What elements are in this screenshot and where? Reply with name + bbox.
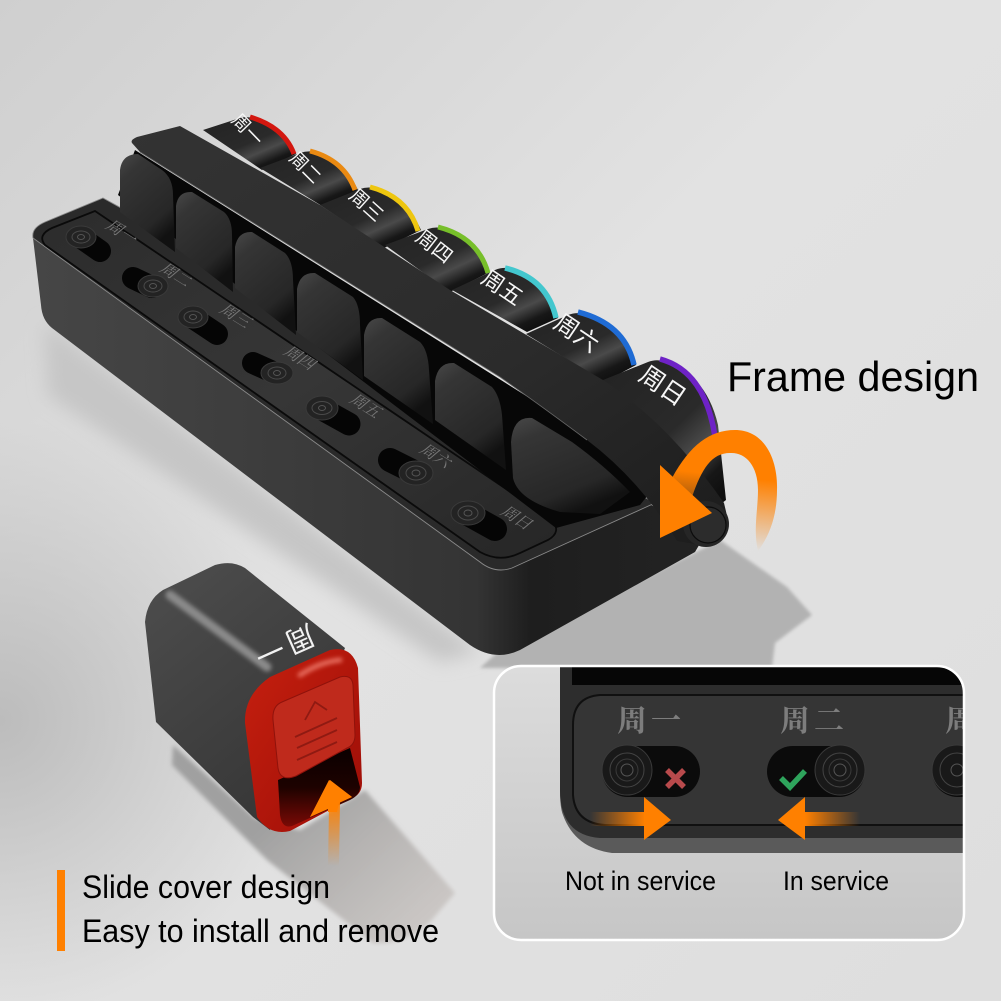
grey body	[145, 563, 345, 830]
sliding cover	[273, 676, 355, 778]
inset plate	[42, 211, 556, 558]
slot sunday	[451, 501, 495, 529]
box monday red	[203, 107, 296, 170]
box monday red: 周一	[226, 107, 270, 151]
switch: in service	[767, 745, 865, 797]
box wednesday yellow	[320, 182, 421, 248]
box thursday green	[385, 222, 490, 292]
tray day labels: 周二	[155, 258, 200, 291]
tray day labels: 周一	[101, 215, 146, 248]
box friday cyan: 周五	[476, 261, 530, 312]
slot thursday	[253, 362, 293, 384]
box sunday purple: 周日	[633, 356, 694, 414]
tray top face	[33, 198, 655, 570]
slot monday	[66, 226, 100, 251]
tray day labels: 周五	[345, 389, 390, 422]
box thursday green: 周四	[411, 222, 460, 269]
front pill compartments	[120, 154, 630, 514]
slot tuesday	[133, 275, 168, 297]
coloured day boxes behind frame	[203, 107, 726, 520]
panel border	[494, 666, 964, 940]
switch: not in service	[602, 745, 700, 797]
body highlight	[170, 595, 267, 667]
caption: slide cover	[82, 869, 439, 949]
single pill box	[145, 563, 362, 832]
black trench behind pills	[118, 150, 660, 528]
tray day labels	[101, 215, 541, 534]
label: not in service: Not in service	[565, 866, 716, 896]
arrow: left	[778, 797, 860, 840]
slot wednesday	[178, 306, 217, 334]
closeup labels: 周	[945, 696, 979, 740]
arrow: right	[590, 797, 671, 840]
caption: slide cover: Slide cover design	[82, 869, 330, 905]
tray day labels: 周四	[279, 341, 324, 374]
pill organizer tray	[33, 150, 705, 655]
slider slots on tray	[66, 226, 495, 529]
box sunday purple	[603, 356, 726, 520]
box friday cyan	[452, 261, 558, 332]
box saturday blue	[526, 303, 636, 382]
box tuesday orange: 周二	[284, 145, 328, 189]
frame strap	[132, 126, 728, 545]
tray closeup	[560, 660, 972, 853]
shadow of tray	[44, 322, 812, 668]
tray day labels: 周日	[496, 501, 541, 534]
title: Frame design: Frame design	[727, 353, 979, 400]
shadow of single pill box	[172, 745, 455, 943]
frame lower edge highlight	[140, 152, 587, 440]
panel: switch detail	[494, 660, 992, 940]
box saturday blue: 周六	[548, 303, 608, 359]
tray body	[33, 198, 705, 655]
slot friday	[306, 396, 349, 424]
hinge knob	[683, 501, 729, 547]
slot saturday	[390, 460, 433, 485]
closeup labels: 周一	[617, 696, 685, 740]
cap opening	[278, 748, 360, 827]
upward orange arrow	[310, 780, 352, 866]
box wednesday yellow: 周三	[344, 182, 390, 227]
orange accent bar	[57, 870, 65, 951]
caption: slide cover: Easy to install and remove	[82, 913, 439, 949]
folding frame bar	[132, 126, 729, 547]
red end cap	[245, 649, 362, 832]
label: in service: In service	[783, 866, 889, 896]
tray day labels: 周六	[415, 439, 461, 472]
closeup labels	[618, 706, 963, 734]
cap highlight	[300, 660, 340, 675]
switch: partial third	[932, 746, 963, 797]
closeup labels: 周二	[780, 696, 848, 740]
box tuesday orange	[260, 145, 358, 206]
weekday label: 周一	[245, 615, 323, 681]
curved orange arrow	[660, 430, 777, 551]
tray day labels: 周三	[215, 299, 260, 332]
